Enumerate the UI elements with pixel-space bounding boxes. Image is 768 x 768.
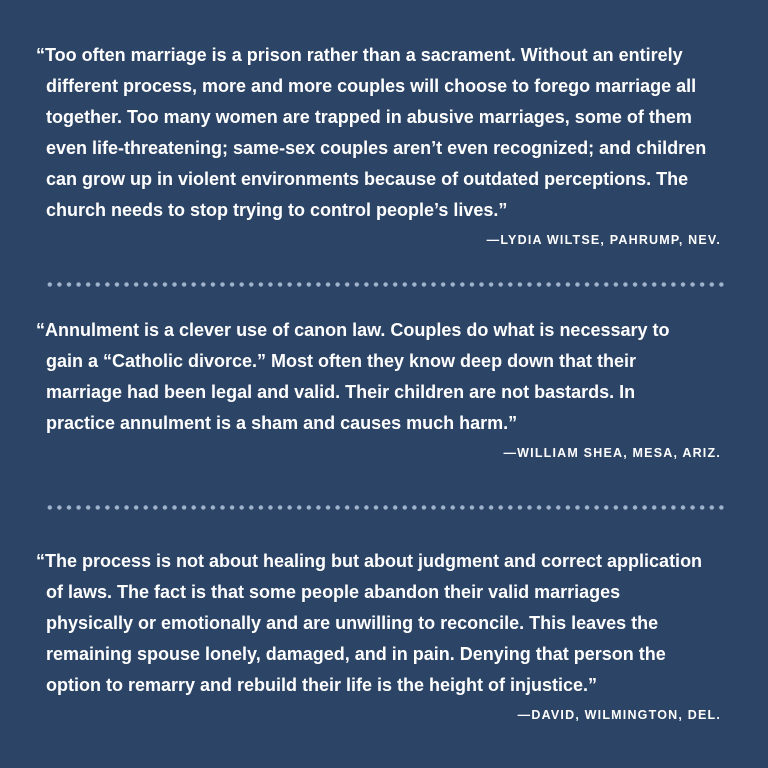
quote 2: gain a “Catholic divorce.” Most often they know deep down that their	[46, 351, 636, 371]
quote 1	[36, 45, 706, 220]
quote 1: together. Too many women are trapped in abusive marriages, some of them	[46, 107, 692, 127]
attribution 1: —LYDIA WILTSE, PAHRUMP, NEV.	[487, 233, 721, 247]
quote 3: option to remarry and rebuild their life is the height of injustice.”	[46, 675, 597, 695]
quote 3	[36, 551, 702, 695]
attribution 3: —DAVID, WILMINGTON, DEL.	[518, 708, 721, 722]
quote 2: practice annulment is a sham and causes much harm.”	[46, 413, 517, 433]
quote 2	[36, 320, 670, 433]
quote 1: different process, more and more couples will choose to forego marriage all	[46, 76, 696, 96]
quote 1: “Too often marriage is a prison rather than a sacrament. Without an entirely	[36, 45, 683, 65]
quote 1: church needs to stop trying to control people’s lives.”	[46, 200, 507, 220]
attribution 2: —WILLIAM SHEA, MESA, ARIZ.	[503, 446, 721, 460]
quote 3: remaining spouse lonely, damaged, and in pain. Denying that person the	[46, 644, 666, 664]
quote 1: even life-threatening; same-sex couples aren’t even recognized; and children	[46, 138, 706, 158]
quote 2: marriage had been legal and valid. Their children are not bastards. In	[46, 382, 635, 402]
quote 3: “The process is not about healing but about judgment and correct application	[36, 551, 702, 571]
quote 3: physically or emotionally and are unwilling to reconcile. This leaves the	[46, 613, 658, 633]
quote 1: can grow up in violent environments because of outdated perceptions. The	[46, 169, 688, 189]
quote 3: of laws. The fact is that some people abandon their valid marriages	[46, 582, 620, 602]
quote 2: “Annulment is a clever use of canon law. Couples do what is necessary to	[36, 320, 670, 340]
